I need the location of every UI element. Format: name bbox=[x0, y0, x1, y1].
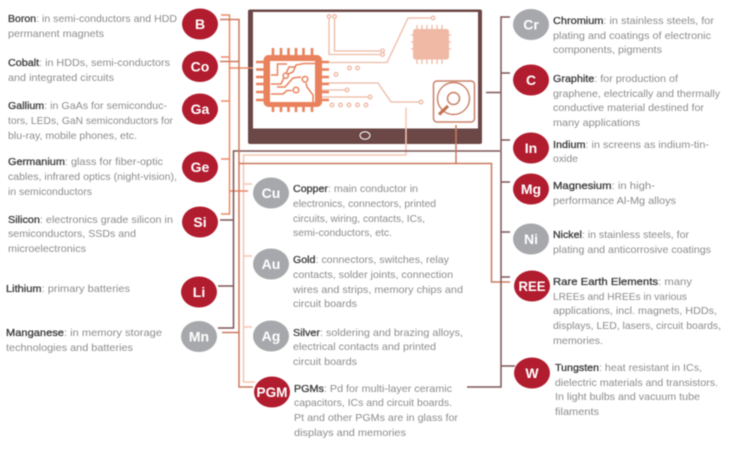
text: chromium bbox=[553, 15, 715, 56]
text: silver: electrical contacts and printed bbox=[293, 341, 436, 353]
text: chromium: Chromium: in stainless steels, for bbox=[553, 15, 715, 27]
text: nickel: Nickel: in stainless steels, for bbox=[553, 229, 689, 241]
badge: manganese bbox=[181, 321, 217, 352]
badge: platinum group metals bbox=[254, 376, 290, 408]
text: copper bbox=[293, 183, 436, 239]
connector lines: bright orange bus bbox=[221, 15, 253, 214]
text: rare earth elements: Rare Earth Elements : many bbox=[553, 276, 693, 288]
badge: gold: Au bbox=[262, 256, 280, 272]
text: magnesium: performance Al-Mg alloys bbox=[553, 195, 676, 207]
badge: tungsten: W bbox=[525, 365, 539, 381]
text: copper: circuits, wiring, contacts, ICs, bbox=[293, 213, 425, 225]
text: platinum group metals: capacitors, ICs and circuit boards. bbox=[294, 397, 452, 409]
badge: cobalt: Co bbox=[191, 58, 209, 74]
badge: germanium bbox=[182, 152, 218, 182]
badge: chromium: Cr bbox=[523, 16, 539, 32]
badge: lithium bbox=[181, 276, 217, 308]
icon: hard disk drive bbox=[434, 81, 474, 122]
text: silver bbox=[293, 327, 463, 368]
badge: silicon: Si bbox=[193, 214, 207, 230]
text: rare earth elements: LREEs and HREEs in various bbox=[553, 291, 687, 303]
text: graphite: Graphite: for production of bbox=[553, 73, 678, 85]
badge: boron: B bbox=[195, 16, 205, 32]
text: graphite: many applications bbox=[553, 117, 640, 129]
text: tungsten: filaments bbox=[555, 406, 599, 418]
badge: chromium bbox=[513, 9, 549, 40]
text: cobalt: and integrated circuits bbox=[8, 72, 114, 84]
badge: nickel bbox=[513, 224, 549, 254]
text: silicon: microelectronics bbox=[8, 243, 86, 255]
text: cobalt: Cobalt: in HDDs, semi-conductors bbox=[8, 57, 170, 69]
text: nickel bbox=[553, 229, 711, 256]
badge: boron bbox=[182, 8, 218, 40]
circuit traces bbox=[322, 15, 435, 107]
text: gold: wires and strips, memory chips and bbox=[292, 284, 463, 296]
text: rare earth elements: displays, LED, lasers, circuit boards, bbox=[553, 320, 721, 332]
text: indium bbox=[553, 139, 710, 165]
badge: lithium: Li bbox=[193, 284, 205, 300]
text: boron: permanent magnets bbox=[8, 28, 104, 40]
text: gold: Gold: connectors, switches, relay bbox=[293, 254, 450, 266]
text: indium: oxide bbox=[553, 153, 578, 165]
text: chromium: plating and coatings of electronic bbox=[553, 30, 711, 42]
text: boron bbox=[8, 13, 177, 40]
badge: silicon bbox=[182, 206, 218, 238]
icon: small chip bbox=[411, 25, 451, 64]
text: silver: circuit boards bbox=[293, 356, 357, 368]
badge: silver: Ag bbox=[262, 328, 280, 344]
text: platinum group metals: PGMs: Pd for multi-layer ceramic bbox=[294, 383, 452, 395]
badge: rare earth elements: REE bbox=[518, 278, 546, 294]
badge: manganese: Mn bbox=[189, 328, 209, 344]
text: platinum group metals: Pt and other PGMs are in glass for bbox=[294, 412, 459, 424]
text: manganese: technologies and batteries bbox=[6, 342, 133, 354]
text: silver: Silver: soldering and brazing alloys, bbox=[293, 327, 463, 339]
text: manganese bbox=[6, 327, 162, 354]
connector lines: dark brown right bus bbox=[467, 17, 515, 387]
badge: graphite bbox=[513, 64, 549, 96]
text: germanium: in semiconductors bbox=[8, 186, 92, 198]
text: graphite: conductive material destined for bbox=[553, 102, 705, 114]
text: tungsten: dielectric materials and transistors. bbox=[555, 377, 718, 389]
text: lithium: Lithium: primary batteries bbox=[6, 283, 130, 295]
text: gallium: blu-ray, mobile phones, etc. bbox=[8, 130, 137, 142]
text: indium: Indium: in screens as indium-tin- bbox=[553, 139, 710, 151]
text: platinum group metals: displays and memories bbox=[294, 427, 406, 439]
text: tungsten bbox=[555, 362, 718, 418]
text: graphite bbox=[553, 73, 721, 129]
connector lines: dark brown left bus bbox=[218, 151, 500, 328]
text: gold: circuit boards bbox=[293, 298, 357, 310]
badge: copper bbox=[253, 178, 289, 208]
text: nickel: plating and anticorrosive coatings bbox=[553, 244, 711, 256]
text: boron: Boron: in semi-conductors and HDD bbox=[8, 13, 177, 25]
text: copper: Copper: main conductor in bbox=[293, 183, 418, 195]
text: silicon bbox=[8, 214, 173, 255]
badge: germanium: Ge bbox=[191, 159, 210, 175]
badge: nickel: Ni bbox=[524, 231, 538, 247]
badge: gallium: Ga bbox=[191, 101, 210, 117]
badge: graphite: C bbox=[526, 72, 536, 88]
text: silicon: semiconductors, SSDs and bbox=[8, 228, 136, 240]
text: magnesium bbox=[553, 180, 676, 207]
badge: cobalt bbox=[182, 51, 218, 82]
badge: copper: Cu bbox=[262, 185, 280, 201]
element badges bbox=[181, 8, 550, 408]
text: tungsten: Tungsten: heat resistant in ICs, bbox=[555, 362, 702, 374]
text: tungsten: In light bulbs and vacuum tube bbox=[555, 391, 700, 403]
badge: gold bbox=[253, 248, 289, 280]
badge: platinum group metals: PGM bbox=[256, 384, 288, 400]
text: gold: contacts, solder joints, connection bbox=[293, 269, 453, 281]
badge: indium bbox=[513, 132, 549, 164]
text: platinum group metals bbox=[294, 383, 459, 439]
badge: rare earth elements bbox=[514, 270, 550, 302]
text: copper: semi-conductors, etc. bbox=[293, 227, 392, 239]
text: gallium: Gallium: in GaAs for semiconduc- bbox=[8, 100, 168, 112]
text: chromium: components, pigments bbox=[553, 44, 662, 56]
text: rare earth elements: memories. bbox=[553, 335, 603, 347]
text: graphite: graphene, electrically and thermally bbox=[553, 88, 721, 100]
text: manganese: Manganese : in memory storage bbox=[6, 327, 162, 339]
badge: silver bbox=[253, 320, 289, 352]
text: cobalt bbox=[8, 57, 170, 84]
badge: indium: In bbox=[525, 140, 537, 156]
text: copper: electronics, connectors, printed bbox=[293, 198, 436, 210]
badge: tungsten bbox=[514, 358, 550, 388]
text: gallium bbox=[8, 100, 173, 142]
text: gallium: tors, LEDs, GaN semiconductors for bbox=[8, 115, 173, 127]
text: gold bbox=[292, 254, 463, 310]
text: germanium bbox=[8, 156, 177, 198]
tablet device bbox=[248, 10, 482, 144]
text: rare earth elements: applications, incl. magnets, HDDs, bbox=[553, 305, 717, 317]
text: rare earth elements bbox=[553, 276, 721, 347]
text: germanium: cables, infrared optics (night-vision), bbox=[8, 171, 177, 183]
text: germanium: Germanium: glass for fiber-optic bbox=[8, 156, 163, 168]
badge: magnesium bbox=[513, 174, 549, 204]
connector lines: light peach bus bbox=[244, 108, 406, 382]
text: silicon: Silicon: electronics grade silicon in bbox=[8, 214, 173, 226]
connector lines: terracotta bus bbox=[220, 20, 510, 387]
badge: gallium bbox=[182, 94, 218, 124]
badge: magnesium: Mg bbox=[521, 181, 541, 197]
text: magnesium: Magnesium : in high- bbox=[553, 180, 656, 192]
icon: main processor chip bbox=[256, 48, 329, 112]
